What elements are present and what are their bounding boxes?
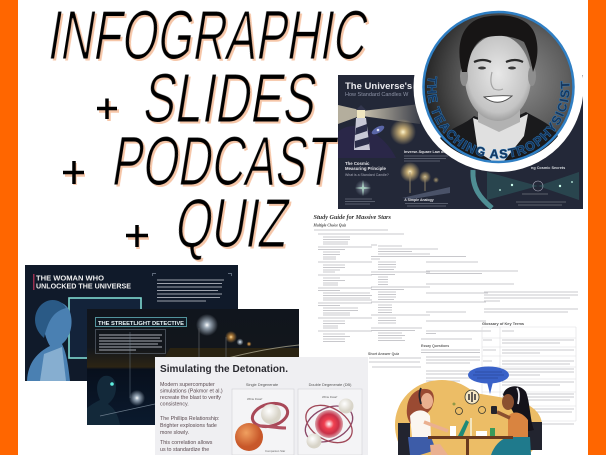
essay section (421, 344, 480, 381)
panel: study guide document (303, 210, 587, 455)
table with tablet and cups (428, 418, 513, 455)
portrait silhouette (27, 300, 72, 381)
answer key section: Short Answer Quiz (368, 352, 399, 356)
column 3 short answers (421, 262, 518, 339)
body text: Brighter explosions fade (160, 423, 217, 429)
text box (152, 274, 232, 301)
title line: + PODCAST: PODCAST (110, 123, 344, 202)
chairs (398, 422, 542, 455)
galaxy (370, 124, 386, 136)
left orange bar (0, 0, 18, 455)
sparkle (129, 390, 145, 406)
diagram: double degenerate (298, 382, 362, 455)
diagram: single degenerate: White Dwarf (247, 397, 262, 401)
heading: THE STREETLIGHT DETECTIVE (98, 321, 184, 327)
panel: slide the streetlight detective (87, 309, 299, 425)
right orange bar (588, 0, 606, 455)
speech bubble (468, 366, 509, 394)
street lamps (400, 162, 450, 199)
heading: infographic title (345, 81, 422, 98)
portrait: head (459, 15, 537, 121)
gravitational lens ribbon (473, 170, 492, 208)
body text: consistency. (160, 402, 189, 408)
body text: The Phillips Relationship: (160, 416, 219, 422)
column 4 paragraphs (484, 292, 578, 312)
body text: us to standardize the (160, 447, 209, 453)
column 1 questions (314, 230, 404, 342)
icons: floating audio symbols (453, 390, 486, 414)
text: cosmic measuring principle: Measuring Principle (345, 166, 386, 171)
badge text: THE TEACHING ASTROPHYSICIST (427, 76, 570, 159)
body text: recreate the blast to verify (160, 395, 221, 401)
title line: + QUIZ: QUIZ (171, 183, 295, 262)
text: cosmic measuring principle: The Cosmic (345, 161, 370, 166)
lighthouse with beam (338, 104, 420, 158)
title line: + SLIDES (97, 58, 325, 139)
title line: + SLIDES: SLIDES (139, 58, 323, 137)
title line: + SLIDES: SLIDES (141, 60, 325, 139)
glowing star (390, 119, 416, 145)
heading: UNLOCKED THE UNIVERSE (36, 284, 131, 290)
heading (33, 274, 131, 290)
neon frame (69, 298, 141, 358)
diagram: single degenerate: Single Degenerate (246, 382, 278, 387)
text: a cosmic analogy: A Simple Analogy (404, 198, 434, 202)
title: product list (44, 0, 376, 264)
heading: study guide: Study Guide for Massive Stars (314, 214, 391, 221)
text: cosmic measuring principle (345, 161, 389, 177)
portrait: suit and shirt (440, 108, 558, 162)
heading: Simulating the Detonation. (160, 364, 288, 375)
street lamps and road (160, 314, 299, 366)
blue ring (424, 12, 574, 162)
heading: infographic title: How Standard Candles W (345, 92, 409, 98)
body text (160, 382, 223, 453)
subheading: multiple choice: Multiple Choice Quiz (312, 224, 347, 228)
portrait badge (414, 10, 583, 172)
diagram: single degenerate: Companion Star (265, 449, 285, 453)
title line: + QUIZ: QUIZ (173, 185, 297, 264)
title line: + PODCAST (63, 121, 344, 202)
detective silhouette (87, 376, 120, 425)
answer key section (368, 352, 421, 367)
body text: more slowly. (160, 430, 189, 436)
icon: compass star (355, 180, 371, 196)
heading: THE WOMAN WHO (36, 276, 105, 282)
text: a cosmic analogy (404, 198, 448, 206)
body text: simulations (Pakmor et al.) (160, 388, 223, 394)
cosmic secrets (487, 166, 579, 205)
title line: + QUIZ (126, 183, 297, 264)
text: footer left (345, 199, 375, 204)
woman left (407, 388, 448, 455)
body text: Modern supercomputer (160, 382, 215, 388)
title line: + PODCAST: PODCAST (108, 121, 342, 200)
heading: infographic title: The Universe's Y (345, 81, 422, 92)
text: inverse square law (404, 150, 456, 161)
glossary table (482, 321, 576, 424)
text: inverse square law: Inverse-Square Law of Light (404, 150, 456, 154)
text: cosmic measuring principle: What is a Standard Candle? (345, 173, 389, 177)
cosmic secrets: ng Cosmic Secrets (531, 166, 565, 170)
essay section: Essay Questions (421, 344, 449, 348)
diagram: single degenerate (232, 382, 294, 455)
panel: slide simulating the detonation (155, 357, 368, 455)
column 2 questions (371, 245, 466, 340)
title line: INFOGRAPHIC (44, 0, 376, 76)
panel: slide the woman who unlocked the universe (25, 265, 238, 381)
text box (96, 330, 166, 354)
diagram: double degenerate: White Dwarf (322, 395, 337, 399)
glossary table: Glossary of Key Terms (482, 321, 524, 326)
diagram: double degenerate: Double Degenerate (DB) (309, 382, 352, 387)
panel: infographic thumbnail (338, 75, 583, 209)
illustration: podcast conversation (395, 366, 542, 455)
woman right (491, 386, 534, 455)
body text: This correlation allows (160, 440, 213, 446)
heading (96, 318, 186, 327)
